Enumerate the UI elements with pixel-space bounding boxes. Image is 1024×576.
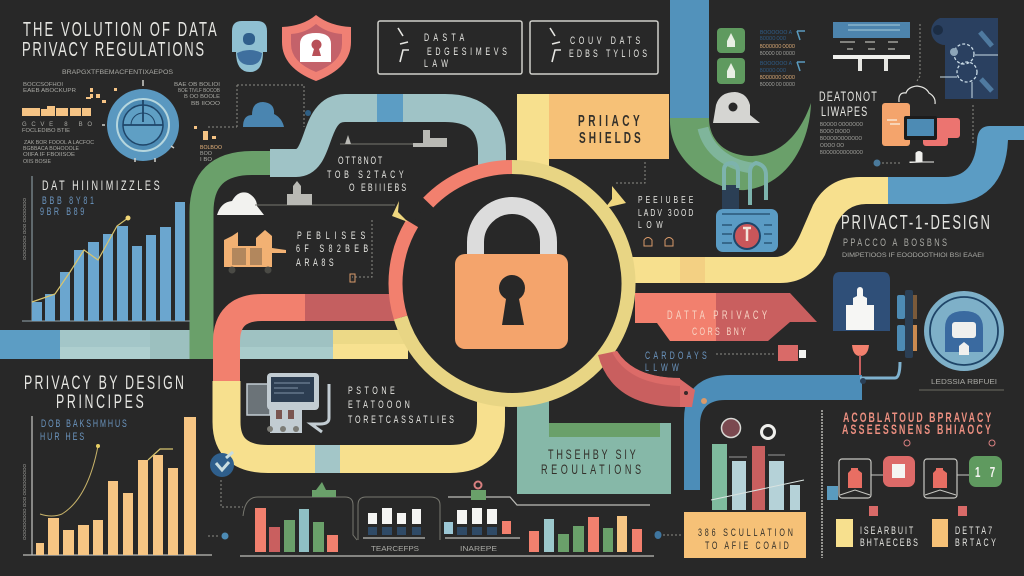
red and yellow pipeline loop	[226, 308, 491, 473]
top vertical blue band and green crescent	[670, 0, 811, 190]
assessment legend: BHTAECEBS	[860, 537, 918, 548]
central padlock ring	[392, 167, 629, 400]
law box 1: DASTA	[424, 32, 465, 43]
bar chart: data minimization: BBB 8Y81	[42, 195, 94, 206]
regulations panel	[517, 400, 671, 494]
privacy by design heading right: DIMPETIOOS IF EOODOOTHIOI BSI EAAEI	[842, 252, 984, 259]
text note: center left: PSTONE	[348, 385, 395, 396]
bar chart: privacy by design	[22, 372, 212, 555]
left small notes: BOO	[200, 151, 213, 157]
bar chart: data minimization	[22, 176, 190, 321]
bar chart: privacy by design: OOOOOOOOO OOO OOOOOOOOO	[22, 463, 27, 540]
top-right green items: BOOOO OOO	[760, 68, 787, 74]
factory icon and note: ARA8S	[296, 257, 334, 268]
top-right green items: BOOOOOO OOOO	[760, 75, 796, 81]
left small notes: OIIFA IF FBOIISOE	[23, 152, 75, 158]
bottom bar charts: INAREPE	[460, 544, 497, 553]
text note: center left	[348, 385, 454, 425]
mid-left landscape note	[217, 130, 447, 215]
shield icon	[282, 15, 351, 81]
text note: center left: TORETCASSATLIES	[348, 414, 454, 425]
data privacy banner: CORS BNY	[692, 326, 746, 337]
bar chart: data minimization: DAT HIINIMIZZLES	[42, 177, 160, 194]
top-right green items: BOOOOOO A	[760, 30, 792, 36]
left small notes: GCVE 8 BO	[22, 122, 92, 128]
yellow and blue pipeline right	[625, 126, 1024, 283]
left small notes	[22, 70, 223, 165]
orange callout: TO AFIE COAID	[705, 540, 789, 551]
left small notes: B OO BOOLE	[184, 94, 220, 100]
left small notes: BOCCSOFHOI	[23, 82, 63, 88]
top-right green items: BOOOO OO OOOO	[760, 82, 796, 88]
blue padlock icon	[716, 163, 778, 252]
round lock badge	[919, 291, 1004, 390]
bottom bar charts	[240, 482, 682, 556]
data privacy banner	[635, 293, 817, 341]
cloud and cards icon	[874, 86, 973, 166]
bar chart: privacy by design: PRINCIPES	[56, 391, 144, 413]
blue map panel	[931, 18, 998, 99]
top-right green items	[717, 28, 805, 88]
assessment flow	[827, 440, 1002, 500]
left small notes: BB IIOOO	[191, 101, 221, 107]
assessment heading: ACOBLATOUD BPRAVACY	[843, 411, 992, 426]
data note top right: BOOOOOOOOOOO	[820, 136, 863, 142]
bar chart: data minimization: OOOOOOO OOO OOOOOOO	[22, 197, 27, 260]
blue pipe bottom right	[684, 345, 900, 490]
assessment legend: ISEARBUIT	[860, 525, 914, 536]
left small notes: OIIS BOSIE	[23, 159, 51, 165]
left small notes: EAEB ABOCKUPR	[23, 88, 76, 94]
regulations panel: REOULATIONS	[541, 461, 641, 478]
text note: right of ring: PEEIUBEE	[638, 194, 693, 205]
data note top right: BOOO DIOOO	[820, 129, 851, 135]
title: PRIVACY REGULATIONS	[22, 38, 204, 61]
tool badge icon	[208, 452, 243, 540]
data note top right: OOOO OO	[820, 143, 845, 149]
text note: right of ring: LOW	[638, 219, 663, 230]
left small notes: I BO	[200, 157, 213, 163]
assessment flow: 17	[975, 464, 995, 481]
bar chart: data minimization: 9BR B89	[40, 206, 84, 217]
text note: right of ring: LADV 3OOD	[638, 207, 693, 218]
monitor icon	[247, 373, 329, 433]
data note top right: BOOOOOOOOOOOO	[820, 150, 864, 156]
dark red arc and legal note	[598, 345, 806, 407]
left horizontal band	[0, 330, 408, 359]
law box 2: EDBS TYLIOS	[569, 48, 647, 59]
left small notes: BAE OB BOLIOI	[174, 82, 221, 88]
dark red arc and legal note: LLWW	[645, 362, 679, 373]
left small notes: BRAPGXTFBEMACFENTIXAEPOS	[62, 70, 173, 76]
data note top right: BOOOO OOOOOOO	[820, 122, 864, 128]
law box 2: COUV DATS	[570, 35, 640, 46]
grouped chart with callout	[711, 418, 804, 510]
factory icon and note: PEBLISES	[297, 230, 365, 241]
data note top right	[819, 88, 877, 156]
data note top right: DEATONOT	[819, 88, 877, 105]
mid-left landscape note: O EBIIIEBS	[349, 182, 406, 193]
left small notes: BGBBACA BOHOOOLE	[23, 146, 79, 152]
title	[22, 18, 217, 61]
left small notes: FOCLEDIBO BTIE	[22, 128, 70, 134]
round lock badge: LEDSSIA RBFUEI	[931, 379, 997, 386]
padlock icon	[455, 206, 568, 349]
law box 1: LAW	[424, 58, 448, 69]
top-right green items: BOOOOOO A	[760, 61, 792, 67]
blue square lock icon	[833, 272, 917, 358]
factory icon and note: 6F S82BEB	[296, 243, 368, 254]
law box 2	[530, 21, 658, 74]
top-right green items: BOOOO OOO	[760, 36, 787, 42]
law box 1	[378, 21, 522, 74]
cloud icon	[208, 85, 311, 127]
assessment legend	[836, 506, 996, 548]
regulations panel: THSEHBY SIY	[548, 446, 636, 463]
bar chart: privacy by design: HUR HES	[40, 431, 84, 442]
text note: right of ring	[615, 162, 693, 246]
assessment heading: ASSEESSNENS BHIAOCY	[842, 423, 991, 438]
privacy shields panel: SHIELDS	[579, 129, 641, 147]
blue badge icon	[232, 21, 267, 72]
gray arch icon	[713, 92, 760, 123]
bar chart: privacy by design: DOB BAKSHMHUS	[41, 418, 127, 429]
assessment heading	[822, 410, 992, 558]
green and teal pipeline	[190, 94, 492, 359]
data note top right: LIWAPES	[821, 103, 867, 120]
orange callout	[684, 512, 806, 558]
bar chart: privacy by design: PRIVACY BY DESIGN	[24, 372, 184, 394]
top-right green items: BOOOO OO OOOO	[760, 51, 796, 57]
top-right green items: BOOOOOO OOOO	[760, 44, 796, 50]
left small notes: ZAK BOR FOOOL A LACFOC	[24, 140, 94, 146]
data privacy banner: DATTA PRIVACY	[667, 310, 767, 323]
assessment legend: BRTACY	[955, 537, 996, 548]
title: THE VOLUTION OF DATA	[23, 18, 217, 41]
orange callout: 386 SCULLATION	[698, 527, 793, 538]
privacy shields panel: PRIIACY	[578, 112, 640, 130]
mid-left landscape note: OTT8NOT	[338, 155, 382, 166]
dark red arc and legal note: CARDOAYS	[645, 350, 707, 361]
target icon	[102, 80, 179, 162]
privacy by design heading right: PPACCO A BOSBNS	[843, 237, 947, 250]
left small notes: BOLBOO	[200, 145, 223, 151]
assessment legend: DETTA7	[955, 525, 992, 536]
factory icon and note	[224, 220, 372, 282]
privacy by design heading right	[841, 211, 990, 259]
privacy shields panel	[517, 94, 669, 166]
left small notes: BOE TIVLF BOCOB	[178, 88, 220, 94]
top right table icon	[833, 22, 920, 81]
law box 1: EDGESIMEVS	[427, 46, 507, 57]
bottom bar charts: TEARCEFPS	[371, 544, 419, 553]
privacy by design heading right: PRIVACT-1-DESIGN	[841, 211, 990, 234]
mid-left landscape note: TOB S2TACY	[327, 169, 404, 180]
text note: center left: ETATOOON	[348, 399, 410, 410]
